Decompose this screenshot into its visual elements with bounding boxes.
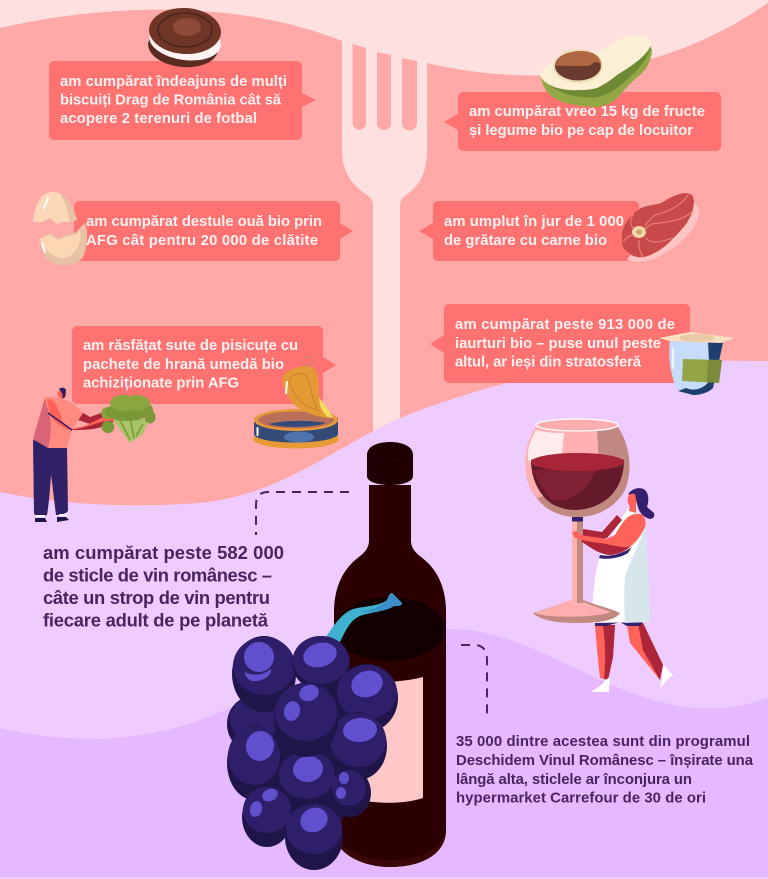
callout: yogurt: iaurturi bio – puse unul peste	[455, 336, 661, 352]
callout: biscuits: acopere 2 terenuri de fotbal	[60, 111, 257, 127]
callout: fruit and vegetables	[444, 92, 721, 151]
grape	[242, 786, 292, 847]
fork	[342, 30, 427, 440]
grape	[274, 682, 338, 757]
callout: eggs	[74, 201, 353, 261]
callout: pet food: pachete de hrană umedă bio	[83, 357, 284, 373]
text block: wine bottles: câte un strop de vin pentru	[43, 587, 270, 608]
icon: steak	[622, 193, 699, 262]
callout: fruit and vegetables: am cumpărat vreo 15 kg de fructe	[469, 104, 705, 120]
callout: pet food	[72, 326, 336, 404]
illustration: man holding broccoli	[33, 388, 156, 522]
callout: pet food: am răsfățat sute de pisicuțe cu	[83, 338, 298, 354]
man legs	[33, 440, 68, 516]
man back arm	[70, 405, 108, 424]
woman legs	[595, 625, 615, 680]
icon: grape bunch	[227, 636, 398, 870]
glass rim	[536, 419, 618, 431]
illustration: woman body	[572, 488, 673, 692]
grape	[285, 803, 343, 870]
bottle label	[360, 677, 423, 803]
wine bottle	[334, 442, 446, 867]
woman shoes	[590, 678, 610, 692]
callout: meat: de grătare cu carne bio	[444, 233, 607, 249]
text block: wine programme: hypermarket Carrefour de 30 de ori	[456, 790, 706, 806]
icon: open tin can	[253, 356, 339, 448]
callout: eggs: am cumpărat destule ouă bio prin	[86, 214, 322, 230]
woman hair	[628, 488, 654, 519]
woman hem	[595, 622, 643, 626]
callout: fruit and vegetables: și legume bio pe cap de locuitor	[469, 123, 693, 139]
callout: meat	[419, 201, 639, 261]
text block: wine bottles: de sticle de vin românesc –	[43, 564, 272, 586]
grape	[329, 712, 387, 780]
woman dress	[592, 508, 650, 623]
text block: wine programme: Deschidem Vinul Românesc – înșirate una	[456, 753, 754, 769]
grape	[292, 636, 350, 690]
callout: yogurt: am cumpărat peste 913 000 de	[455, 317, 675, 333]
callout: biscuits: am cumpărat îndeajuns de mulți	[60, 74, 287, 90]
man shoes	[35, 514, 69, 522]
glass wine	[531, 456, 624, 510]
woman back arm	[572, 515, 622, 540]
callout: eggs: AFG cât pentru 20 000 de clătite	[86, 233, 318, 249]
woman neck and face	[628, 493, 637, 513]
grape	[331, 769, 371, 817]
grape	[232, 636, 296, 712]
bottle base shade	[334, 830, 446, 867]
icon: broken egg	[33, 192, 87, 265]
background: salmon blob	[0, 3, 768, 520]
icon: sandwich biscuit	[146, 6, 223, 71]
grape	[336, 664, 398, 732]
illustration: woman front arm and waist	[572, 514, 646, 559]
callout: meat: am umplut în jur de 1 000	[444, 214, 624, 230]
illustration: wine glass	[525, 419, 629, 623]
callout: biscuits: biscuiți Drag de România cât să	[60, 92, 282, 108]
glass foot	[533, 600, 620, 623]
icon: yogurt cup	[659, 332, 735, 395]
callout: yogurt: altul, ar ieși din stratosferă	[455, 354, 642, 370]
glass bowl	[525, 427, 629, 517]
grape	[227, 696, 280, 752]
text block: wine programme	[456, 734, 754, 806]
icon: avocado	[540, 35, 652, 107]
glass stem	[572, 517, 583, 606]
dashed connector: bottle to text	[256, 492, 349, 535]
grape backing	[250, 670, 380, 840]
callout: pet food: achiziționate prin AFG	[83, 376, 239, 392]
grape	[278, 751, 336, 801]
man shirt shadow	[33, 398, 51, 448]
background: darker lilac wave	[0, 629, 768, 877]
grape	[227, 726, 281, 800]
text block: wine bottles	[43, 542, 284, 630]
text block: wine programme: 35 000 dintre acestea sunt din programul	[456, 734, 750, 750]
text block: wine bottles: fiecare adult de pe planetă	[43, 610, 269, 630]
callout: yogurt	[430, 304, 690, 383]
man front arm	[47, 399, 117, 430]
bottle dark shadow	[335, 597, 445, 661]
dashed connector: bottle to programme text	[461, 645, 487, 714]
background: lilac wave	[0, 360, 768, 879]
glass collar	[572, 517, 583, 522]
broccoli	[101, 395, 156, 443]
icon: grape stem	[326, 593, 402, 642]
text block: wine programme: lângă alta, sticlele ar înconjura un	[456, 772, 692, 788]
callout: biscuits	[49, 61, 316, 140]
man shirt	[33, 397, 83, 448]
man head	[58, 388, 66, 399]
bottle cap	[367, 442, 413, 485]
text block: wine bottles: am cumpărat peste 582 000	[43, 542, 284, 563]
